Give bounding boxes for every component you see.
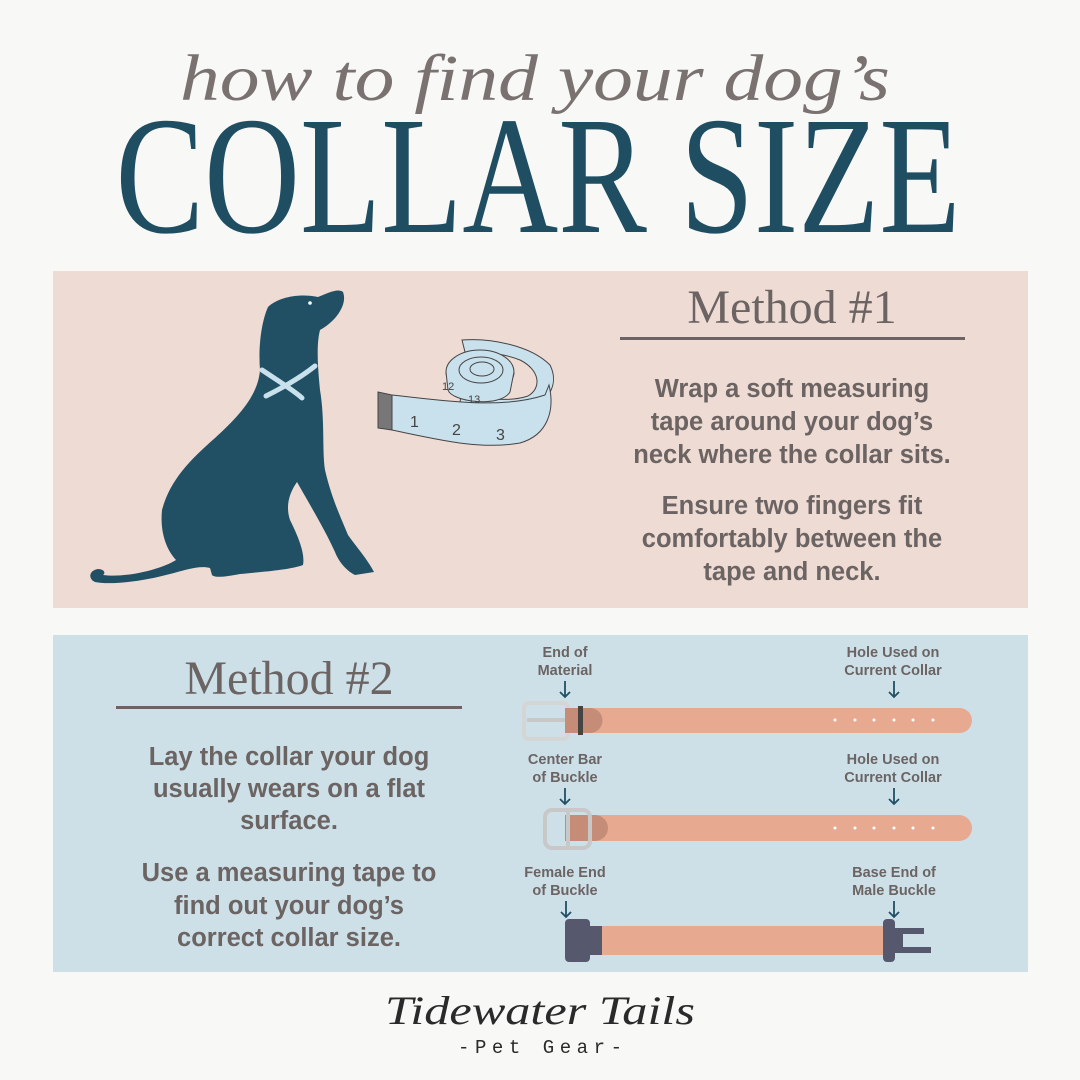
text: method 2 instructions (142, 743, 436, 952)
footer: brand logo: Tidewater Tails (385, 988, 695, 1033)
footer: brand logo (385, 988, 695, 1059)
heading: Method #2 (116, 652, 462, 709)
text: method 1 instructions: Ensure two fingers fit (662, 492, 923, 520)
text: method 1 instructions: comfortably between the (642, 525, 942, 553)
collar 2: center bar: Current Collar (844, 770, 942, 786)
panel: method 2 (53, 635, 1028, 972)
text: method 1 instructions (633, 375, 951, 586)
text: method 2 instructions: Use a measuring tape to (142, 859, 436, 887)
icon: measuring tape: 3 (496, 427, 505, 444)
panel: method 1 (53, 271, 1028, 608)
text: method 2 instructions: surface. (240, 807, 338, 835)
collar 3: side release buckle (524, 865, 936, 962)
collar 3: side release buckle: of Buckle (532, 883, 598, 899)
collar 3: side release buckle: Female End (524, 865, 606, 881)
text: method 1 instructions: Wrap a soft measuring (655, 375, 929, 403)
icon: measuring tape: 13 (468, 394, 480, 406)
text: method 2 instructions: correct collar size. (177, 924, 401, 952)
text: method 2 instructions: usually wears on a flat (153, 775, 426, 803)
collar 3: side release buckle: Base End of (852, 865, 936, 881)
heading: Method #1: Method #1 (687, 281, 897, 334)
collar 2: center bar: of Buckle (532, 770, 598, 786)
collar 2: center bar (528, 752, 972, 848)
heading: Method #2: Method #2 (184, 652, 394, 705)
icon: measuring tape: 1 (410, 414, 419, 431)
collar 1: end of material: End of (542, 645, 588, 661)
collar 3: side release buckle: Male Buckle (852, 883, 936, 899)
text: method 1 instructions: tape and neck. (703, 558, 881, 586)
text: method 2 instructions: Lay the collar your dog (149, 743, 429, 771)
footer: brand logo: -Pet Gear- (458, 1037, 622, 1059)
collar 1: end of material: Hole Used on (847, 645, 939, 661)
collar 1: end of material (524, 645, 972, 739)
text: method 1 instructions: tape around your dog’s (651, 408, 933, 436)
icon: measuring tape: 2 (452, 422, 461, 439)
collar 1: end of material: Material (538, 663, 592, 679)
icon: measuring tape: 12 (442, 381, 454, 393)
icon: measuring tape (378, 340, 553, 445)
text: method 1 instructions: neck where the collar sits. (633, 441, 951, 469)
collar 1: end of material: Current Collar (844, 663, 942, 679)
text: method 2 instructions: find out your dog’s (174, 892, 404, 920)
collar 2: center bar: Hole Used on (847, 752, 939, 768)
icon: dog silhouette (90, 291, 374, 583)
collar 2: center bar: Center Bar (528, 752, 602, 768)
heading: Method #1 (620, 281, 965, 340)
title: script subtitle: how to find your dog’s (180, 42, 890, 115)
